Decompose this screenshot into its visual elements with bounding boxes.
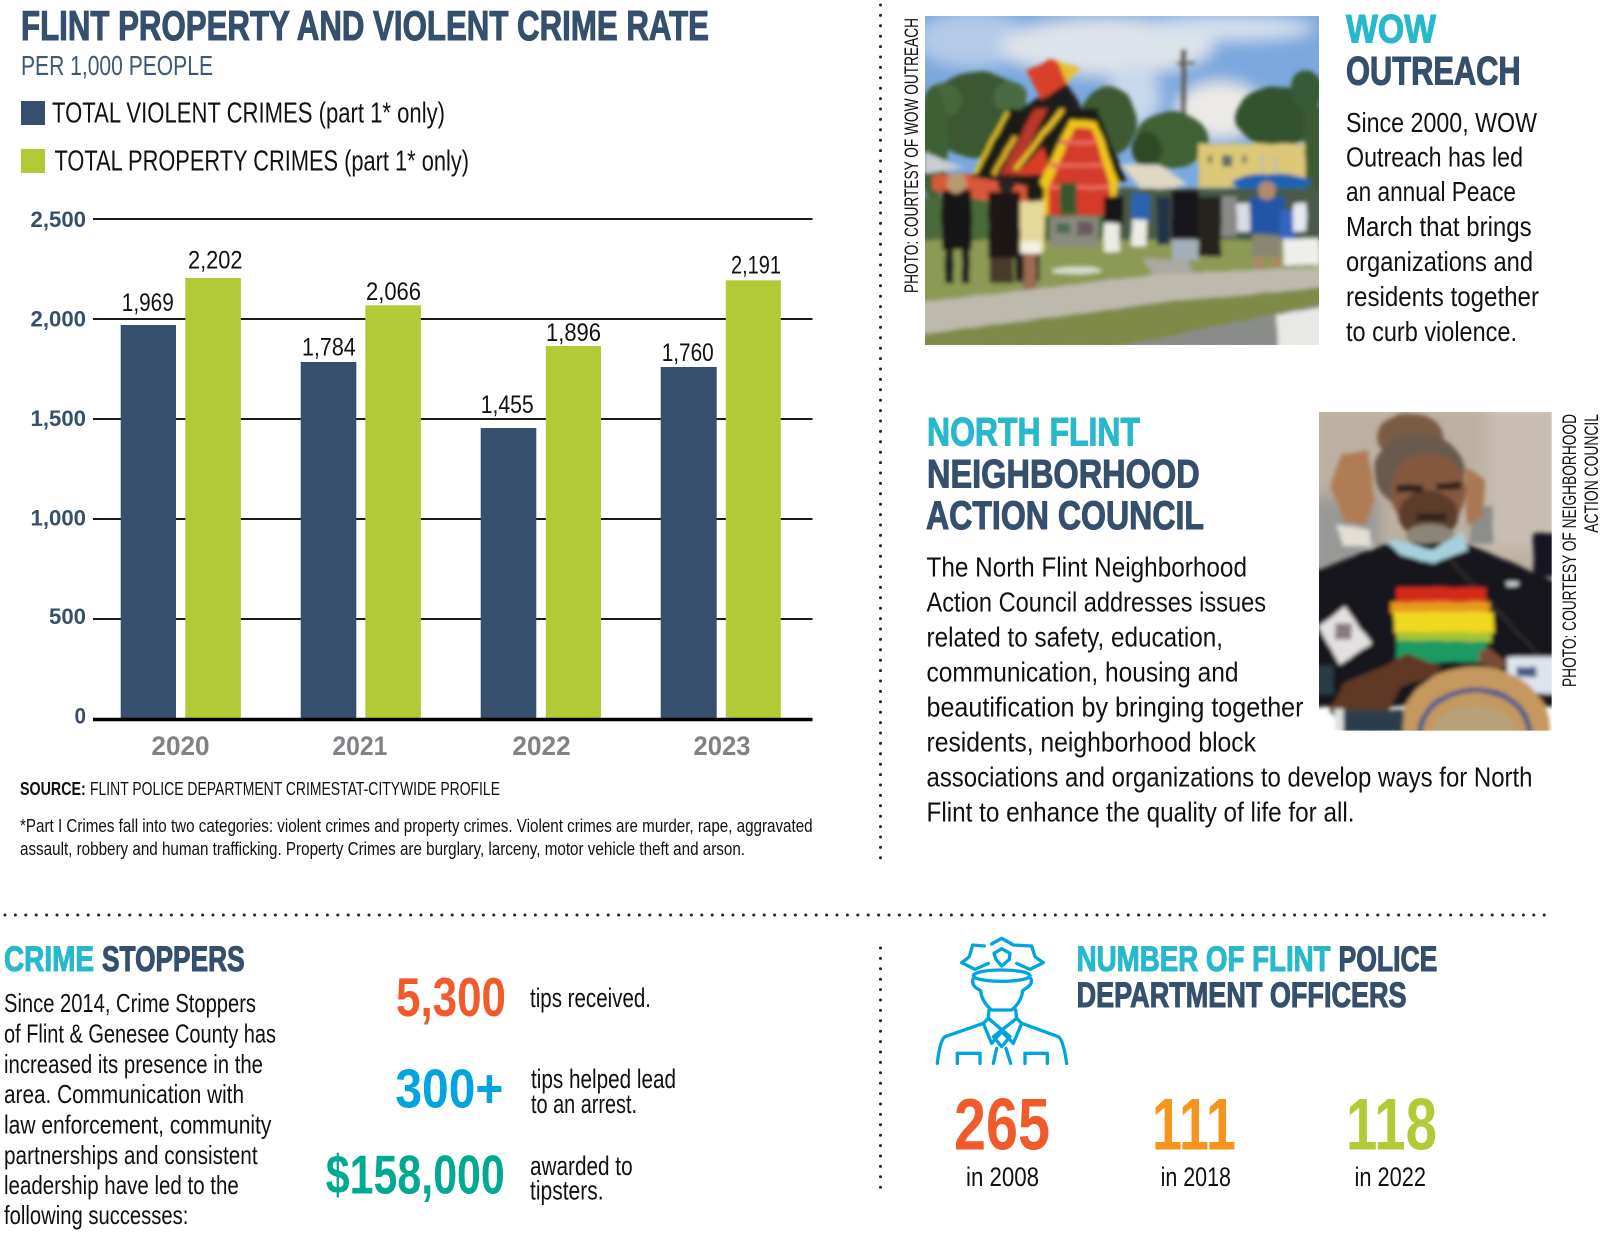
stat: amount awarded: awarded to	[530, 1151, 633, 1181]
bar value labels: 2,202	[188, 247, 242, 275]
stat: tips received	[396, 966, 651, 1028]
title: FLINT PROPERTY AND VIOLENT CRIME RATE	[21, 2, 709, 49]
body text: residents, neighborhood block	[926, 727, 1257, 758]
bar value labels: 2,066	[366, 278, 421, 306]
heading	[4, 940, 245, 979]
stat: tips leading to arrest	[395, 1058, 676, 1120]
bar value labels: 1,784	[302, 334, 356, 362]
stat: tips received: 5,300	[396, 966, 506, 1028]
source line: FLINT POLICE DEPARTMENT CRIMESTAT-CITYWIDE PROFILE	[90, 778, 500, 799]
body text: related to safety, education,	[926, 622, 1223, 653]
body text	[4, 988, 276, 1230]
heading	[926, 411, 1204, 538]
bar value labels: 1,896	[546, 319, 601, 347]
stat: officers in 2008	[954, 1084, 1050, 1192]
y axis labels: 2,000	[30, 306, 86, 332]
x axis years: 2023	[694, 731, 750, 761]
body text: Flint to enhance the quality of life for all.	[926, 797, 1354, 828]
building	[1198, 144, 1305, 187]
legend	[21, 98, 469, 178]
stat: officers in 2008: in 2008	[966, 1162, 1039, 1192]
body text: partnerships and consistent	[4, 1140, 258, 1170]
body text	[1346, 107, 1539, 347]
heading: ACTION COUNCIL	[926, 494, 1204, 538]
body text: to curb violence.	[1346, 316, 1517, 347]
people	[1060, 183, 1077, 214]
x axis years	[151, 731, 750, 761]
body text: Since 2000, WOW	[1346, 107, 1537, 138]
subtitle: PER 1,000 PEOPLE	[21, 50, 213, 81]
heading: NUMBER OF FLINT	[1077, 940, 1331, 979]
sidewalk and road	[917, 267, 1327, 335]
stat: officers in 2018: in 2018	[1161, 1162, 1231, 1192]
stat: officers in 2022: 118	[1346, 1084, 1437, 1165]
y axis labels: 1,500	[30, 406, 86, 431]
heading: STOPPERS	[102, 940, 245, 979]
body text: area. Communication with	[4, 1079, 244, 1109]
body text: residents together	[1346, 281, 1539, 312]
photo: speaker at podium	[1319, 412, 1552, 731]
y axis labels: 0	[74, 704, 86, 728]
heading: WOW	[1346, 8, 1436, 52]
bar value labels: 2,191	[731, 252, 781, 280]
legend: TOTAL VIOLENT CRIMES (part 1* only)	[52, 98, 445, 130]
stat: amount awarded: tipsters.	[530, 1176, 604, 1206]
body text: leadership have led to the	[4, 1170, 239, 1200]
heading: CRIME	[4, 940, 94, 979]
heading: NEIGHBORHOOD	[927, 452, 1200, 496]
photo credit: PHOTO: COURTESY OF NEIGHBORHOOD	[1559, 414, 1581, 687]
stat: amount awarded: $158,000	[326, 1144, 505, 1206]
photo credit	[1559, 414, 1600, 687]
icon: police officer	[937, 938, 1067, 1063]
body text: following successes:	[4, 1200, 188, 1230]
bar value labels: 1,969	[122, 289, 174, 317]
stat: officers in 2018: 111	[1152, 1084, 1236, 1165]
footnote: assault, robbery and human trafficking. Property Crimes are burglary, larceny, motor vehicle theft and arson.	[20, 839, 745, 859]
y axis labels: 1,000	[30, 506, 86, 530]
y axis labels	[30, 207, 86, 728]
stat: officers in 2018	[1152, 1084, 1236, 1192]
panel: North Flint Neighborhood Action Council	[926, 400, 1600, 828]
y axis labels: 500	[49, 604, 86, 629]
x axis years: 2020	[151, 731, 210, 761]
body text: communication, housing and	[926, 657, 1238, 688]
photo: peace march with inflatable	[925, 16, 1319, 345]
panel: Crime Stoppers	[4, 940, 676, 1230]
stat: tips leading to arrest: to an arrest.	[531, 1089, 637, 1119]
bar value labels: 1,455	[481, 391, 534, 419]
bars: violent crimes	[121, 325, 717, 719]
heading	[1346, 8, 1521, 93]
x axis years: 2021	[332, 731, 387, 761]
body text: March that brings	[1346, 211, 1532, 242]
footnote	[20, 816, 813, 859]
inflatable	[928, 170, 1032, 204]
footnote: *Part I Crimes fall into two categories: violent crimes and property crimes. Violent crimes are murder, rape, aggravated	[20, 816, 813, 836]
lawn	[917, 233, 1327, 310]
stat: tips received: tips received.	[530, 983, 651, 1013]
stat: tips leading to arrest: 300+	[395, 1058, 503, 1120]
y axis labels: 2,500	[30, 207, 86, 232]
panel: WOW Outreach	[901, 0, 1539, 348]
body text: beautification by bringing together	[926, 692, 1304, 723]
legend: TOTAL PROPERTY CRIMES (part 1* only)	[54, 146, 469, 178]
source line	[20, 778, 500, 799]
body text: law enforcement, community	[4, 1110, 271, 1140]
body text: Action Council addresses issues	[926, 587, 1266, 618]
body text: The North Flint Neighborhood	[926, 552, 1247, 583]
heading: DEPARTMENT OFFICERS	[1077, 976, 1407, 1015]
x axis years: 2022	[512, 731, 571, 761]
heading: OUTREACH	[1346, 49, 1521, 93]
source line: SOURCE:	[20, 778, 86, 799]
body text: Since 2014, Crime Stoppers	[4, 988, 256, 1018]
panel: crime rate chart	[20, 2, 813, 859]
stat: officers in 2022: in 2022	[1354, 1162, 1426, 1192]
body text: of Flint & Genesee County has	[4, 1019, 276, 1049]
body text: an annual Peace	[1346, 176, 1516, 207]
body text: organizations and	[1346, 246, 1533, 277]
heading	[1077, 940, 1437, 1015]
bar chart	[30, 207, 812, 761]
trees	[928, 72, 1028, 158]
panel: police department officers	[937, 938, 1437, 1192]
heading: NORTH FLINT	[927, 411, 1140, 455]
tents	[925, 152, 963, 173]
bar value labels	[122, 247, 781, 419]
body text	[926, 552, 1532, 828]
stat: officers in 2022	[1346, 1084, 1437, 1192]
stat: tips leading to arrest: tips helped lead	[531, 1064, 676, 1094]
body text: Outreach has led	[1346, 142, 1523, 172]
bars: property crimes	[185, 278, 781, 719]
body text: increased its presence in the	[4, 1049, 263, 1079]
bar value labels: 1,760	[662, 339, 714, 367]
soft sky	[925, 16, 1319, 200]
heading: POLICE	[1338, 940, 1437, 979]
stat: officers in 2008: 265	[954, 1084, 1050, 1165]
